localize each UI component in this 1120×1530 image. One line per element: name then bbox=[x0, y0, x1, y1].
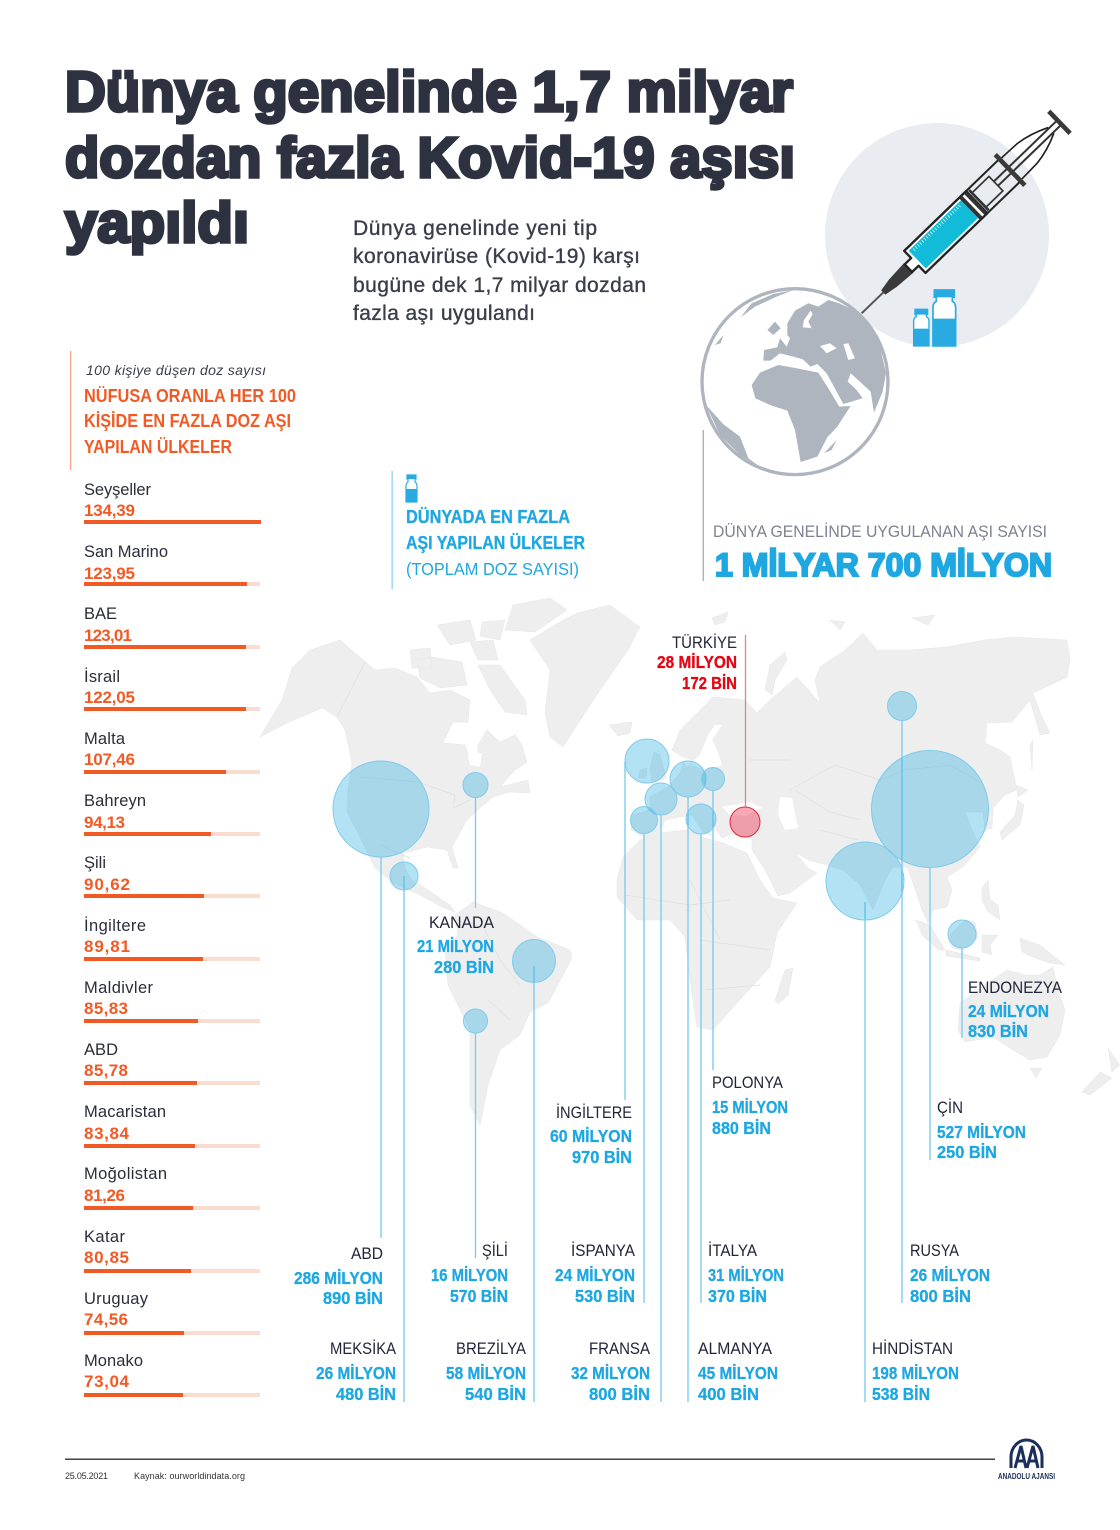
bar: Moğolistan: Moğolistan bbox=[84, 1165, 167, 1183]
South America bbox=[445, 902, 572, 1125]
bar: San Marino: 123,95 bbox=[84, 564, 135, 583]
label: İtalya bbox=[708, 1241, 784, 1306]
label: ABD: 286 MİLYON bbox=[294, 1268, 383, 1288]
footer: 25.05.2021 bbox=[65, 1471, 108, 1481]
illustration: syringe, vials and globe bbox=[702, 105, 1076, 475]
Sulawesi bbox=[982, 935, 998, 955]
label: ABD: 890 BİN bbox=[323, 1288, 383, 1308]
label: Fransa: FRANSA bbox=[589, 1340, 650, 1358]
label: Şili: 570 BİN bbox=[450, 1286, 508, 1306]
label: İspanya: İSPANYA bbox=[571, 1241, 635, 1260]
bar: İngiltere bbox=[84, 916, 260, 961]
title: dozdan fazla Kovid-19 aşısı bbox=[65, 126, 795, 190]
bar: Maldivler bbox=[84, 979, 260, 1023]
label: Çin: 527 MİLYON bbox=[937, 1122, 1026, 1142]
label: İtalya: İTALYA bbox=[708, 1241, 757, 1260]
Eurasia bbox=[631, 633, 1070, 923]
label: Polonya: 15 MİLYON bbox=[712, 1097, 788, 1117]
intro text: koronavirüse (Kovid-19) karşı bbox=[353, 245, 640, 268]
bar: Şili: Şili bbox=[84, 854, 106, 872]
bar: ABD: ABD bbox=[84, 1041, 118, 1059]
North America bbox=[260, 640, 530, 912]
Africa bbox=[617, 830, 797, 1030]
label: Hindistan bbox=[872, 1339, 959, 1404]
bar: ABD: 85,78 bbox=[84, 1061, 128, 1080]
backdrop circle bbox=[825, 123, 1049, 347]
bar: Monako bbox=[84, 1352, 260, 1397]
bar: Monako: Monako bbox=[84, 1352, 143, 1370]
icon: globe bbox=[702, 289, 888, 475]
bar: BAE: 123,01 bbox=[84, 626, 132, 645]
bubbles: dose counts by country bbox=[333, 692, 988, 1033]
divider: left panel accent bbox=[70, 351, 71, 470]
label: Polonya bbox=[712, 1074, 788, 1138]
intro text: bugüne dek 1,7 milyar dozdan bbox=[353, 274, 646, 297]
label: Rusya bbox=[910, 1242, 990, 1306]
bar: BAE: BAE bbox=[84, 605, 117, 623]
bar: Macaristan: Macaristan bbox=[84, 1103, 166, 1121]
icon: syringe bbox=[847, 105, 1076, 329]
label: Almanya: 45 MİLYON bbox=[698, 1363, 778, 1383]
label: Polonya: 880 BİN bbox=[712, 1118, 771, 1138]
label: Brezilya: BREZİLYA bbox=[456, 1339, 526, 1358]
label: Endonezya bbox=[968, 979, 1062, 1041]
label: Almanya bbox=[698, 1340, 778, 1404]
heading: most vaccinated countries: (TOPLAM DOZ SAYISI) bbox=[406, 559, 579, 579]
label: Şili: ŞİLİ bbox=[482, 1241, 508, 1260]
label: Kanada: KANADA bbox=[429, 914, 494, 932]
New Zealand bbox=[1082, 1048, 1120, 1095]
label: İspanya bbox=[555, 1241, 635, 1306]
Japan bbox=[1000, 740, 1033, 840]
bar: Monako: 73,04 bbox=[84, 1372, 130, 1391]
bar: Bahreyn bbox=[84, 792, 260, 836]
label: Almanya: ALMANYA bbox=[698, 1340, 772, 1358]
label: Kanada: 280 BİN bbox=[434, 957, 494, 977]
intro text bbox=[353, 217, 646, 325]
intro text: fazla aşı uygulandı bbox=[353, 302, 535, 325]
label: Endonezya: ENDONEZYA bbox=[968, 979, 1062, 997]
bar: Seyşeller bbox=[84, 481, 261, 524]
title bbox=[65, 60, 795, 255]
logo: Anadolu Ajansı bbox=[998, 1440, 1055, 1481]
title: Dünya genelinde 1,7 milyar bbox=[65, 60, 793, 124]
bar: Katar: 80,85 bbox=[84, 1248, 129, 1267]
label: Fransa: 32 MİLYON bbox=[571, 1363, 650, 1383]
icon: vials bbox=[914, 290, 956, 346]
heading: most vaccinated countries bbox=[392, 471, 585, 589]
label: Endonezya: 24 MİLYON bbox=[968, 1001, 1049, 1021]
footer bbox=[65, 1440, 1055, 1481]
bar: Malta: 107,46 bbox=[84, 750, 135, 769]
bar: Seyşeller: Seyşeller bbox=[84, 481, 152, 499]
Great Lakes bbox=[468, 753, 482, 767]
bar: Maldivler: 85,83 bbox=[84, 999, 128, 1018]
callout: global total doses: 1 MİLYAR 700 MİLYON bbox=[715, 547, 1052, 583]
bar: Katar: Katar bbox=[84, 1228, 126, 1246]
heading: most vaccinated countries: AŞI YAPILAN ÜLKELER bbox=[406, 533, 585, 553]
bar: Uruguay: Uruguay bbox=[84, 1290, 149, 1308]
Borneo bbox=[950, 920, 978, 950]
bar: Maldivler: Maldivler bbox=[84, 979, 154, 997]
leader lines bbox=[381, 635, 962, 1402]
label: Endonezya: 830 BİN bbox=[968, 1021, 1028, 1041]
bar: Moğolistan: 81,26 bbox=[84, 1186, 125, 1205]
label: İspanya: 530 BİN bbox=[575, 1286, 635, 1306]
bar: Şili: 90,62 bbox=[84, 875, 130, 894]
bar: İngiltere: İngiltere bbox=[84, 916, 146, 935]
Australia bbox=[958, 967, 1065, 1078]
heading: per 100 ranking: KİŞİDE EN FAZLA DOZ AŞI bbox=[84, 411, 291, 431]
logo: Anadolu Ajansı: ANADOLU AJANSI bbox=[998, 1472, 1055, 1481]
label: Fransa bbox=[571, 1340, 650, 1404]
Country borders bbox=[337, 662, 980, 1020]
label: Hindistan: 538 BİN bbox=[872, 1384, 930, 1404]
label: Brezilya: 58 MİLYON bbox=[446, 1363, 526, 1383]
label: Kanada bbox=[417, 914, 494, 977]
Arctic islands bbox=[410, 598, 567, 715]
label: Türkiye: 28 MİLYON bbox=[657, 652, 737, 672]
bar: ABD bbox=[84, 1041, 260, 1085]
label: Meksika: 26 MİLYON bbox=[316, 1363, 396, 1383]
callout: global total doses: DÜNYA GENELİNDE UYGULANAN AŞI SAYISI bbox=[713, 522, 1047, 541]
intro text: Dünya genelinde yeni tip bbox=[353, 217, 597, 240]
label: Çin bbox=[937, 1098, 1026, 1162]
bar: İsrail: 122,05 bbox=[84, 688, 135, 707]
Sumatra and Java bbox=[916, 920, 980, 961]
heading: per 100 ranking bbox=[84, 386, 296, 457]
bar: Bahreyn: Bahreyn bbox=[84, 792, 146, 810]
Novaya Zemlya and Svalbard bbox=[712, 612, 935, 695]
label: Rusya: 800 BİN bbox=[910, 1286, 971, 1306]
label: Rusya: 26 MİLYON bbox=[910, 1265, 990, 1285]
heading: most vaccinated countries: DÜNYADA EN FAZLA bbox=[406, 507, 570, 527]
label: Almanya: 400 BİN bbox=[698, 1384, 759, 1404]
bar: Macaristan: 83,84 bbox=[84, 1124, 130, 1143]
bar: İsrail bbox=[84, 667, 260, 711]
label: Meksika: 480 BİN bbox=[336, 1384, 396, 1404]
label: Türkiye: TÜRKİYE bbox=[672, 633, 737, 652]
bar: Macaristan bbox=[84, 1103, 260, 1148]
label: Hindistan: HİNDİSTAN bbox=[872, 1339, 953, 1358]
label: Brezilya: 540 BİN bbox=[465, 1384, 526, 1404]
bar: Şili bbox=[84, 854, 260, 898]
UK and Ireland bbox=[638, 752, 666, 785]
world map bbox=[260, 598, 1120, 1125]
bar: Bahreyn: 94,13 bbox=[84, 813, 125, 832]
footer: Kaynak: ourworldindata.org bbox=[134, 1471, 245, 1481]
bar: San Marino bbox=[84, 543, 260, 586]
bar chart: doses per 100 people bbox=[84, 481, 261, 1397]
icon: small vial bbox=[406, 475, 417, 502]
label: Kanada: 21 MİLYON bbox=[417, 936, 494, 956]
label: Fransa: 800 BİN bbox=[589, 1384, 650, 1404]
bar: Seyşeller: 134,39 bbox=[84, 501, 135, 520]
label: Çin: 250 BİN bbox=[937, 1142, 997, 1162]
New Guinea bbox=[1020, 938, 1065, 965]
label: ABD: ABD bbox=[351, 1245, 383, 1263]
label: Çin: ÇİN bbox=[937, 1098, 963, 1117]
note: left panel caption: 100 kişiye düşen doz sayısı bbox=[86, 362, 266, 378]
bar: BAE bbox=[84, 605, 260, 649]
label: İngiltere bbox=[550, 1103, 632, 1167]
label: Şili bbox=[431, 1241, 508, 1306]
label: İngiltere: 970 BİN bbox=[572, 1147, 632, 1167]
label: ABD bbox=[294, 1245, 383, 1308]
heading: per 100 ranking: NÜFUSA ORANLA HER 100 bbox=[84, 386, 296, 406]
label: Meksika bbox=[316, 1339, 396, 1404]
Philippines and Taiwan bbox=[982, 880, 1000, 920]
title: yapıldı bbox=[65, 191, 249, 255]
label: İngiltere: İNGİLTERE bbox=[556, 1103, 632, 1122]
bar: İsrail: İsrail bbox=[84, 667, 120, 686]
label: Hindistan: 198 MİLYON bbox=[872, 1363, 959, 1383]
Greenland bbox=[530, 605, 640, 747]
Seas: Baltic, Black and Caspian bbox=[690, 725, 798, 830]
heading: per 100 ranking: YAPILAN ÜLKELER bbox=[84, 437, 232, 457]
label: Rusya: RUSYA bbox=[910, 1242, 959, 1260]
label: İtalya: 31 MİLYON bbox=[708, 1265, 784, 1285]
bar: Malta: Malta bbox=[84, 730, 126, 748]
label: Brezilya bbox=[446, 1339, 526, 1404]
bar: Katar bbox=[84, 1228, 260, 1273]
label: Polonya: POLONYA bbox=[712, 1074, 783, 1092]
label: Şili: 16 MİLYON bbox=[431, 1265, 508, 1285]
label: Türkiye bbox=[657, 633, 737, 693]
callout: global total doses bbox=[702, 430, 1052, 583]
bar: Malta bbox=[84, 730, 260, 774]
label: İtalya: 370 BİN bbox=[708, 1286, 767, 1306]
Iceland bbox=[609, 722, 632, 736]
bar: Moğolistan bbox=[84, 1165, 260, 1210]
bar: San Marino: San Marino bbox=[84, 543, 168, 561]
label: İngiltere: 60 MİLYON bbox=[550, 1126, 632, 1146]
bar: Uruguay bbox=[84, 1290, 260, 1335]
label: İspanya: 24 MİLYON bbox=[555, 1265, 635, 1285]
bar: İngiltere: 89,81 bbox=[84, 937, 130, 956]
bar: Uruguay: 74,56 bbox=[84, 1310, 128, 1329]
label: Meksika: MEKSİKA bbox=[330, 1339, 396, 1358]
label: Türkiye: 172 BİN bbox=[682, 673, 737, 693]
